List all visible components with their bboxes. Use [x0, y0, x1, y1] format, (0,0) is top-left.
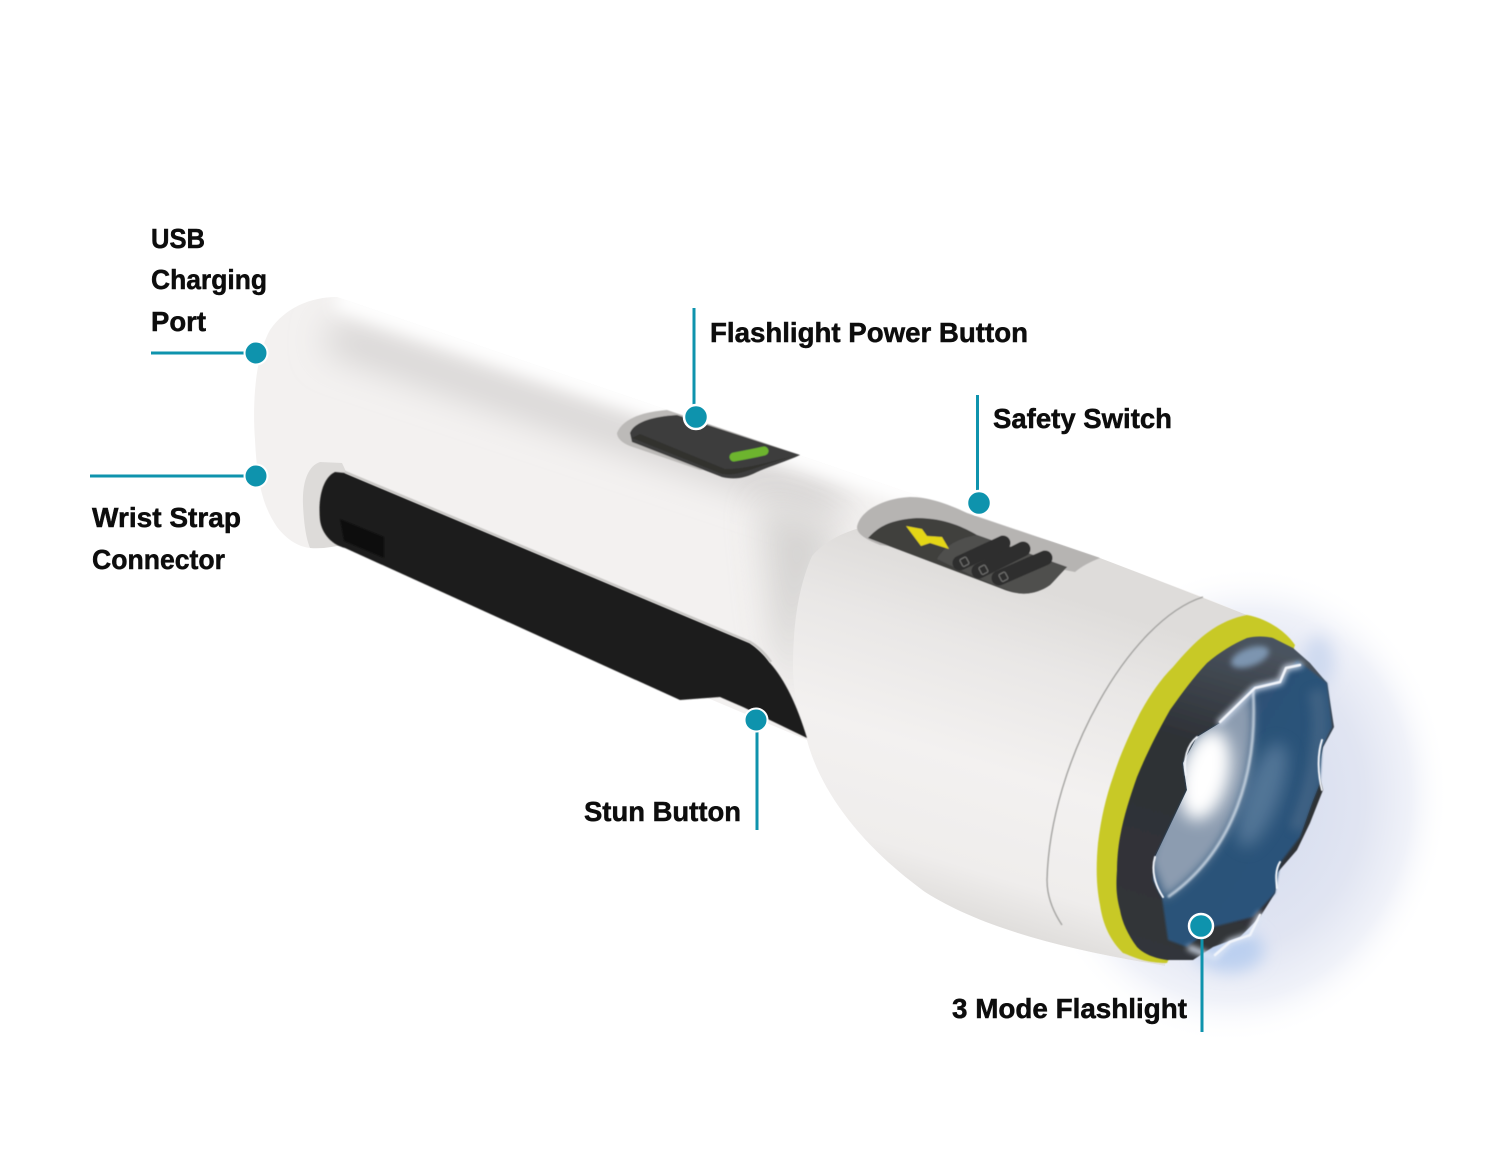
green indicator light	[734, 451, 764, 457]
illustration: flashlight stun device	[254, 297, 1422, 1012]
grip rim	[303, 462, 350, 548]
safety switch	[857, 497, 1100, 594]
label: Safety Switch: Safety Switch	[993, 403, 1172, 434]
label: 3 Mode Flashlight	[952, 914, 1213, 1032]
label: USB Charging Port: USB	[151, 223, 205, 254]
label: USB Charging Port: Port	[151, 306, 206, 337]
lightning arcs and bezel highlights	[1190, 665, 1300, 958]
label: Wrist Strap Connector	[90, 464, 268, 575]
label: 3 Mode Flashlight: 3 Mode Flashlight	[952, 993, 1187, 1024]
lens	[1150, 642, 1332, 958]
label: Wrist Strap Connector: Connector	[92, 544, 225, 575]
label: Wrist Strap Connector: Wrist Strap	[92, 502, 241, 533]
label: Flashlight Power Button	[684, 308, 1028, 429]
label: Safety Switch	[967, 395, 1172, 515]
label: USB Charging Port	[151, 223, 268, 364]
head section	[793, 520, 1247, 966]
black grip	[320, 472, 807, 738]
head section seam line	[1047, 597, 1203, 925]
flashlight body	[254, 297, 1247, 966]
label: Stun Button	[584, 708, 768, 830]
label: Stun Button: Stun Button	[584, 796, 741, 827]
flashlight power button	[617, 410, 800, 478]
yellow ring	[1097, 615, 1295, 963]
lens bezel	[1116, 636, 1334, 960]
switch ridges	[959, 543, 1045, 582]
top bezel glow	[1228, 642, 1272, 672]
label: USB Charging Port: Charging	[151, 264, 267, 295]
light glow around lens	[993, 533, 1487, 1077]
icon: lightning bolt	[906, 526, 949, 549]
label: Flashlight Power Button: Flashlight Power Button	[710, 317, 1028, 348]
